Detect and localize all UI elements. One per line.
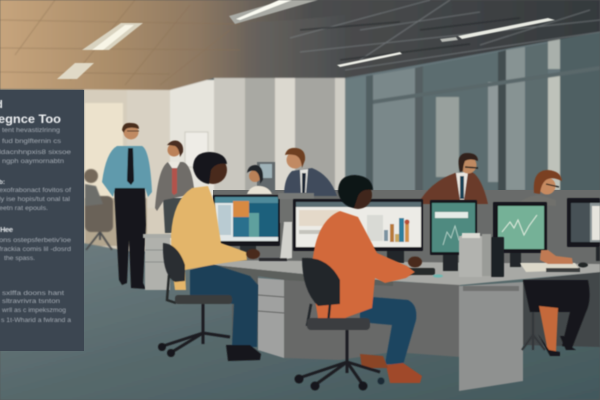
shoes	[386, 363, 422, 383]
panel text block 2: eetn rat epouls.	[0, 205, 48, 212]
back filing cabinet	[143, 234, 215, 290]
panel text block 3: Hee	[0, 225, 13, 234]
panel text block 3: ons ostepsferbetiv'ioe	[0, 237, 72, 244]
chair	[302, 258, 340, 306]
foreground man in yellow sweater	[158, 152, 261, 361]
bar chart on monitor	[384, 218, 410, 242]
picture on wall	[185, 132, 208, 167]
panel text block 2	[0, 179, 71, 212]
panel text block 4	[1, 290, 71, 324]
panel text block 3: the spass.	[4, 255, 35, 262]
main desk	[213, 260, 600, 391]
panel text block 3	[0, 225, 72, 262]
panel text block 2: ly ise hopis/tut onal tal	[0, 196, 70, 203]
man in brown suit	[418, 153, 488, 204]
shoe	[226, 345, 261, 361]
man in navy suit	[284, 148, 337, 196]
wall behind the desks	[213, 190, 600, 272]
side device between monitors	[259, 193, 314, 261]
monitor 2: wide charts	[293, 199, 423, 263]
windows	[345, 32, 600, 240]
chair	[163, 243, 185, 282]
floor	[0, 240, 600, 400]
shirt	[313, 211, 415, 318]
back wall	[84, 86, 174, 251]
panel text block 1: ldacnhnpxis8 sixsoe	[0, 149, 72, 156]
head	[344, 181, 372, 209]
jeans	[190, 264, 258, 347]
panel text block 1: fud bnglfternin cs	[2, 138, 61, 145]
desk items: binders, paper, keyboard	[407, 233, 588, 278]
head	[199, 156, 227, 184]
woman behind first monitor	[247, 162, 275, 194]
panel text block 3: frackia comis lil -dosrd	[0, 246, 71, 253]
foreground man in orange shirt	[294, 175, 422, 390]
window mullions and bars	[366, 75, 373, 205]
monitor 1: dashboard	[213, 195, 280, 255]
panel text block 1	[0, 127, 72, 165]
seated person in background	[84, 169, 113, 250]
ceiling	[0, 0, 600, 90]
panel heading	[0, 99, 61, 126]
columns	[214, 76, 245, 226]
drawers	[258, 278, 284, 358]
monitor 4: green chart	[493, 202, 547, 267]
doorway	[85, 103, 123, 198]
jeans	[360, 296, 416, 365]
desk end panel	[459, 282, 523, 391]
sweater	[171, 186, 247, 290]
woman with glasses at right desk	[517, 170, 562, 206]
panel text block 1: ngph oaymornabtn	[2, 158, 65, 165]
panel text block 4: sltravrivra tsnton	[2, 298, 61, 305]
text panel	[0, 90, 84, 351]
monitor 3: teal chart	[430, 200, 477, 271]
panel text block 2: exofrabonact fovitos of	[0, 187, 71, 194]
woman legs under desk	[522, 280, 590, 356]
under-desk panels	[232, 270, 258, 340]
standing man in blue shirt	[102, 123, 152, 289]
monitor 5: edge screen	[567, 198, 600, 261]
ceiling lights	[57, 0, 555, 79]
panel text block 1: tent hevastizlrinng	[2, 127, 60, 134]
panel text block 4: s 1t-Wharid a fwlrand a	[1, 317, 71, 324]
panel text block 4: sxlffa doons hant	[2, 290, 64, 297]
desk top	[213, 260, 600, 285]
standing woman in grey jacket	[155, 140, 195, 233]
panel text block 4: wrll as c impekszmog	[1, 307, 66, 314]
